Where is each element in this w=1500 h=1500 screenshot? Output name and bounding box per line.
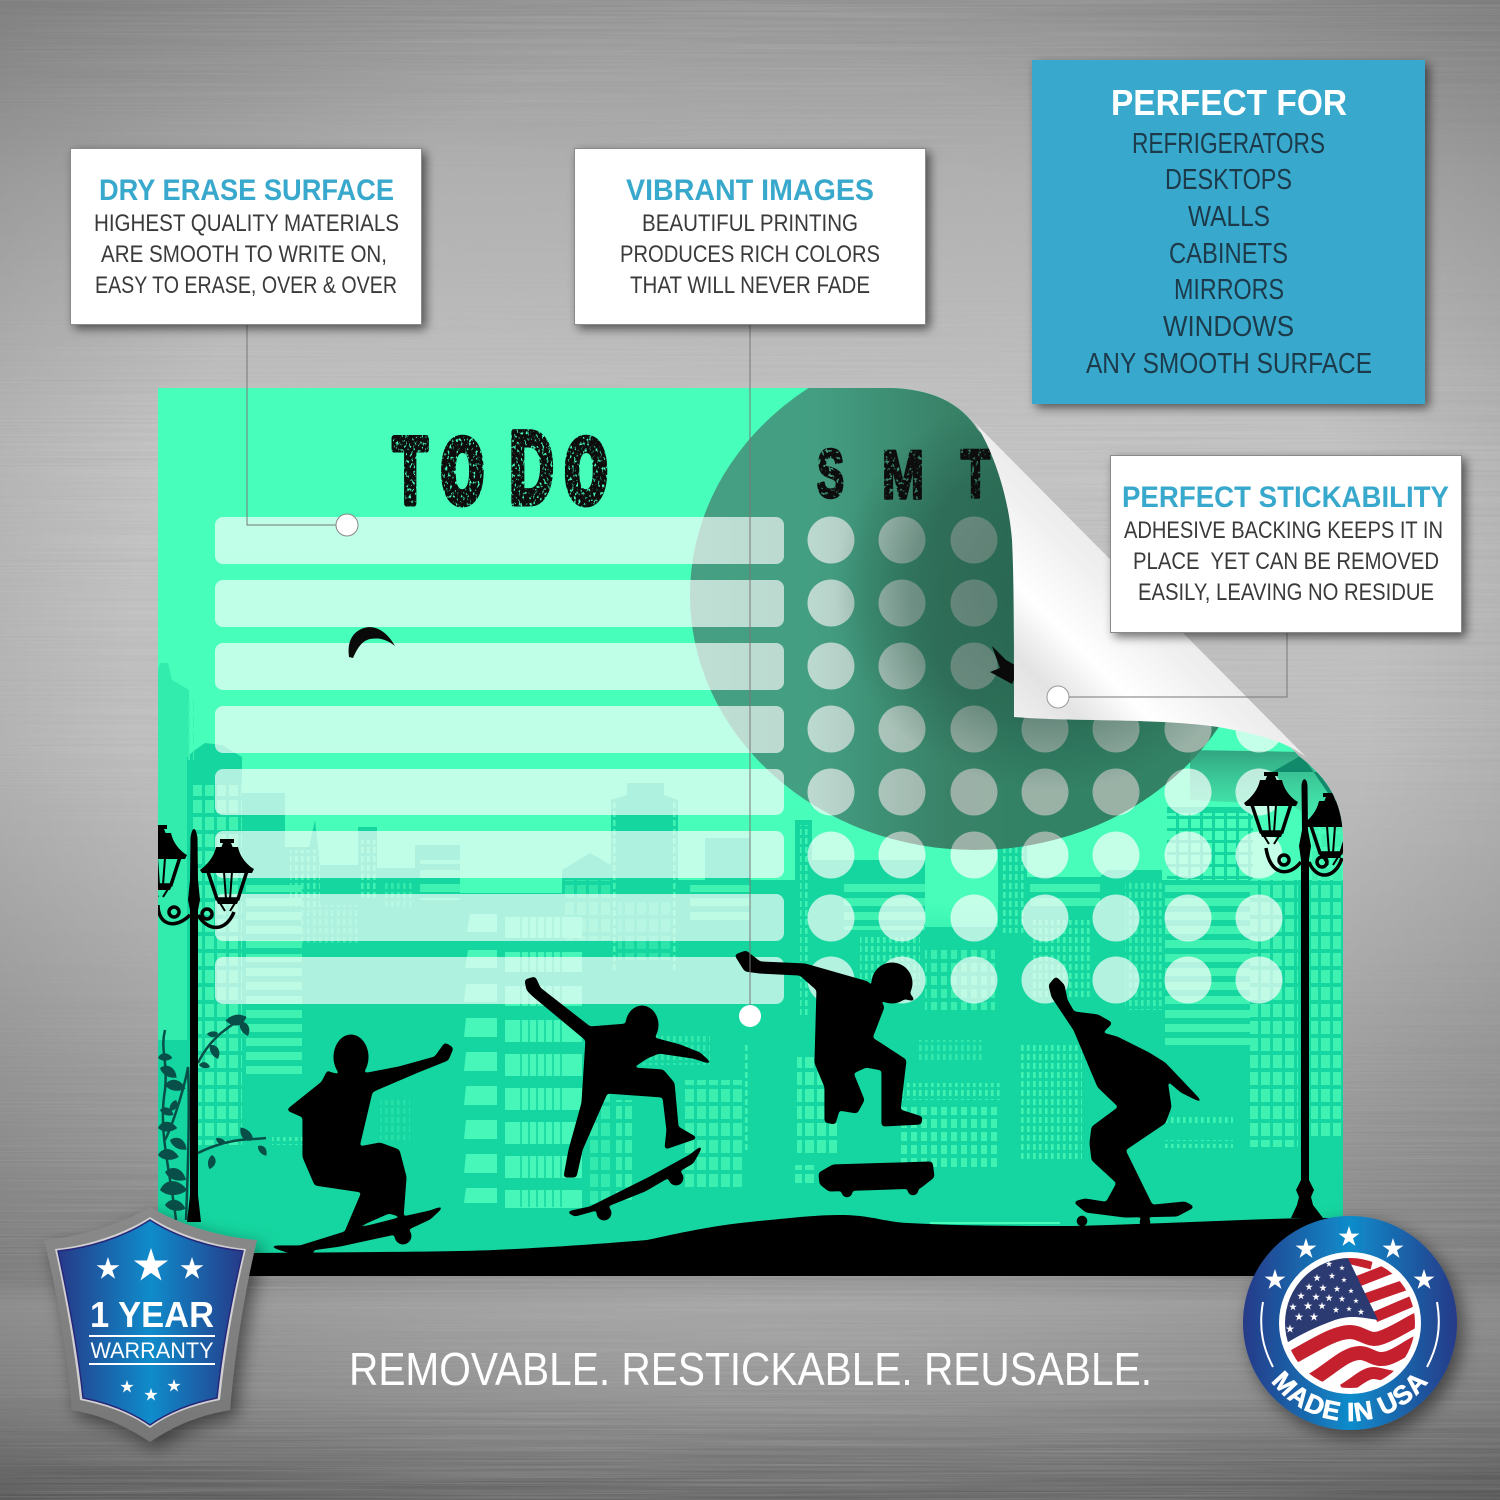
plant: [158, 1013, 269, 1220]
badge: 1 year warranty: WARRANTY: [90, 1338, 214, 1363]
callout: perfect for: ANY SMOOTH SURFACE: [1086, 348, 1372, 380]
tagline: REMOVABLE. RESTICKABLE. REUSABLE.: [349, 1343, 1152, 1395]
callout: dry erase surface: [70, 148, 422, 324]
heading: to do: o: [440, 394, 484, 528]
weekday letters: [817, 448, 991, 500]
bright strip on ground line: [930, 1222, 1060, 1224]
curl shadow on sheet: [690, 388, 1219, 850]
skater 3: [735, 951, 934, 1197]
skater 4: [1049, 977, 1203, 1227]
callout: dry erase surface: ARE SMOOTH TO WRITE ON,: [101, 241, 387, 268]
leader line: stickability: [1047, 633, 1287, 708]
writing rows: [215, 517, 784, 1004]
weekday letters: M: [882, 437, 924, 513]
callout: perfect for: CABINETS: [1169, 238, 1288, 270]
skater 1: [269, 1035, 453, 1259]
callout: perfect for: WALLS: [1188, 201, 1270, 233]
weekday letters: S: [817, 436, 844, 512]
callout: vibrant images: [574, 148, 926, 324]
callout: perfect stickability: ADHESIVE BACKING KEEPS IT IN: [1124, 517, 1443, 544]
heading: to do: o: [564, 394, 608, 528]
leader line: vibrant images: [739, 325, 761, 1027]
callout: perfect stickability: PERFECT STICKABILITY: [1122, 481, 1449, 514]
callout: perfect for: WINDOWS: [1163, 311, 1294, 343]
heading: to do: T: [393, 419, 427, 524]
city skyline background: [157, 663, 1343, 1210]
bird: [349, 627, 395, 658]
callout: vibrant images: VIBRANT IMAGES: [626, 174, 874, 207]
peeled corner: [975, 423, 1306, 757]
callout: vibrant images: THAT WILL NEVER FADE: [630, 272, 870, 299]
callout: perfect for: MIRRORS: [1174, 274, 1284, 306]
callout: vibrant images: PRODUCES RICH COLORS: [620, 241, 880, 268]
callout: perfect stickability: EASILY, LEAVING NO RESIDUE: [1138, 579, 1434, 606]
shadow tint over rows and circles near the fold: [809, 388, 1218, 850]
callout: perfect for: PERFECT FOR: [1111, 82, 1347, 123]
flag: [1285, 1258, 1415, 1388]
badge: made in usa: MADE IN USA: [1271, 1370, 1429, 1422]
badge: made in usa: [1238, 1212, 1473, 1446]
callout: vibrant images: BEAUTIFUL PRINTING: [642, 210, 858, 237]
corner band under curl: [1190, 750, 1343, 835]
callout: perfect stickability: PLACE YET CAN BE REMOVED: [1133, 548, 1439, 575]
callout: perfect for: REFRIGERATORS: [1132, 128, 1325, 160]
callout: dry erase surface: DRY ERASE SURFACE: [99, 174, 394, 207]
callout: perfect stickability: [1110, 456, 1462, 632]
skater 2: [525, 977, 712, 1220]
callout: perfect for: [1032, 60, 1425, 404]
weekly check circles: [808, 516, 1282, 1004]
badge: 1 year warranty: 1 YEAR: [90, 1294, 214, 1335]
badge: 1 year warranty: [44, 1207, 257, 1442]
callout: dry erase surface: HIGHEST QUALITY MATERIALS: [94, 210, 399, 237]
callout: perfect for: DESKTOPS: [1165, 164, 1292, 196]
left lamp post: [158, 825, 254, 1222]
balcony tower: [464, 914, 582, 1208]
weekday letters: T: [961, 436, 990, 512]
callout: dry erase surface: EASY TO ERASE, OVER & OVER: [95, 272, 397, 299]
magnetic chart sheet: [133, 340, 1357, 1276]
ground: [158, 1215, 1343, 1276]
right lamp post: [1244, 772, 1343, 1218]
heading: to do: D: [509, 411, 554, 525]
bird under the curl: [990, 646, 1014, 684]
leader line: dry erase: [247, 325, 358, 536]
